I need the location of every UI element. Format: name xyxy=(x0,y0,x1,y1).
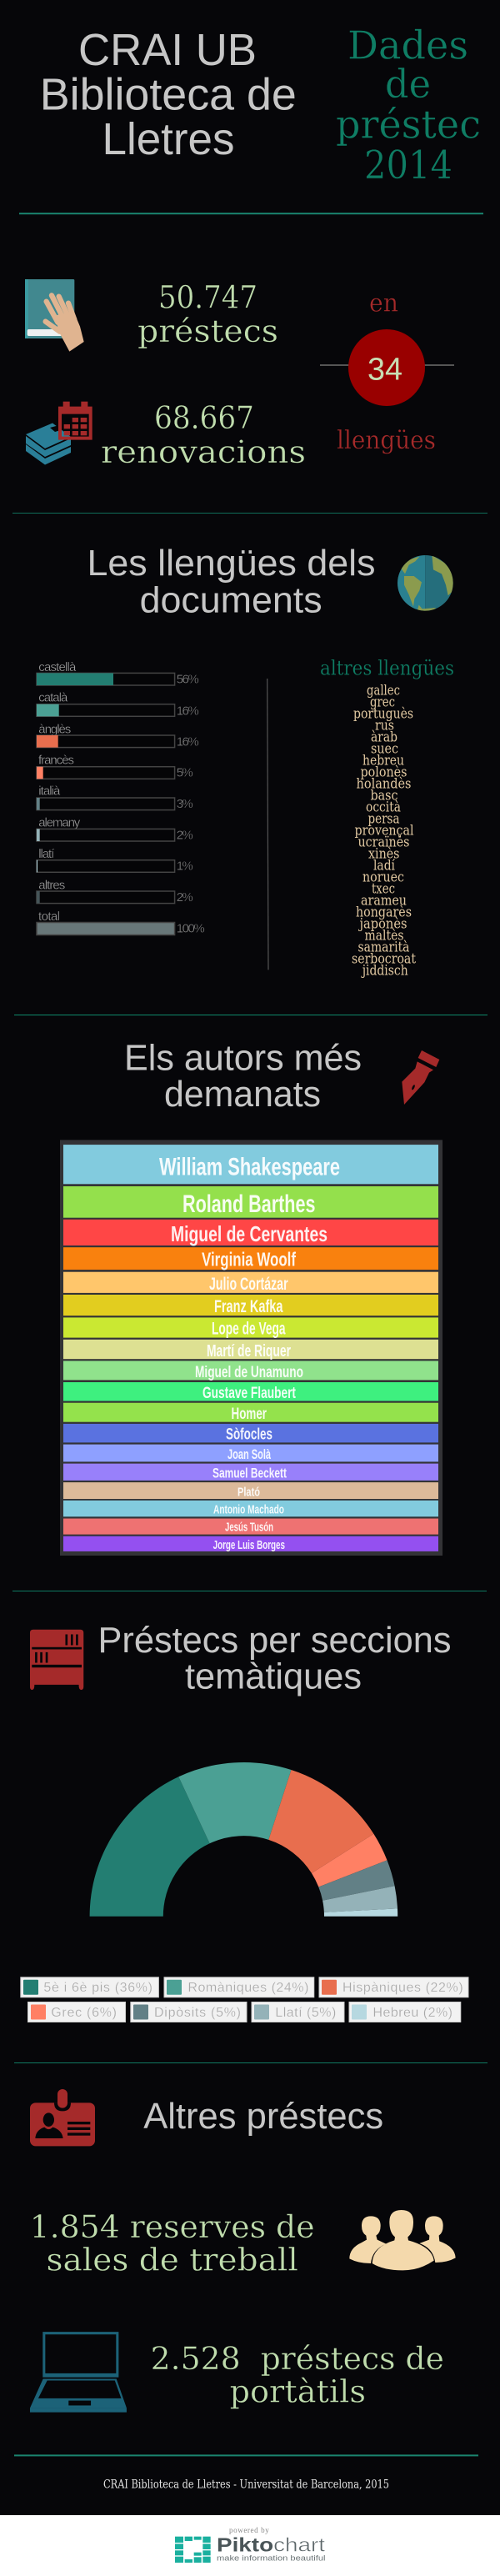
heading: Les llengües dels documents xyxy=(87,543,375,620)
icon: group of people xyxy=(349,2210,456,2270)
legend item: Hebreu: Hebreu (2%) xyxy=(372,2006,452,2020)
bar: italià 3%: 3% xyxy=(177,797,193,811)
row: Homer: Homer xyxy=(232,1406,267,1423)
row: Samuel Beckett: Samuel Beckett xyxy=(212,1466,287,1481)
row: Plató xyxy=(63,1482,438,1500)
stat: 50.747 préstecs xyxy=(138,280,278,349)
logo wordmark: Pikto chart xyxy=(217,2534,326,2556)
callout: en 34 llengües: en xyxy=(369,289,398,318)
bar: català 16% xyxy=(37,691,199,718)
bar: ànglès 16%: ànglès xyxy=(38,723,71,737)
row: Plató: Plató xyxy=(238,1486,260,1500)
bar: llatí 1% xyxy=(37,847,193,873)
heading: Altres préstecs: Altres préstecs xyxy=(143,2096,383,2137)
icon: stack of books xyxy=(26,423,71,465)
bar: italià 3%: italià xyxy=(38,784,61,799)
heading: Els autors més demanats: Els autors més xyxy=(124,1038,362,1079)
list: altres llengües: arameu xyxy=(361,892,407,909)
subtitle: Dades de préstec 2014: 2014 xyxy=(364,143,452,188)
bar: llatí 1%: llatí xyxy=(38,847,55,861)
slice: Grec 6% xyxy=(312,1834,387,1887)
list: altres llengües: serbocroat xyxy=(352,950,416,967)
stat: 1.854 reserves de sales de treball: sales de treball xyxy=(47,2243,298,2278)
bar: castellà 56%: castellà xyxy=(38,660,77,674)
icon: bookshelf xyxy=(30,1630,83,1690)
slice: Romàniques 24% xyxy=(178,1762,292,1843)
row: Lope de Vega xyxy=(63,1317,438,1339)
list: altres llengües: hongarès xyxy=(356,904,412,920)
footer band: powered by Piktochart: powered by xyxy=(229,2526,269,2534)
callout: en 34 llengües: 34 xyxy=(368,352,402,387)
list: altres llengües: suec xyxy=(371,740,398,757)
slice: Llatí 5% xyxy=(322,1886,398,1912)
list: altres llengües: occità xyxy=(366,799,401,815)
row: Miguel de Cervantes xyxy=(63,1220,438,1246)
heading: Préstecs per seccions temàtiques: Préstecs per seccions xyxy=(98,1620,452,1661)
row: Gustave Flaubert: Gustave Flaubert xyxy=(202,1385,296,1402)
row: Martí de Riquer xyxy=(63,1340,438,1361)
list: altres llengües: grec xyxy=(370,694,395,710)
legend item: Grec xyxy=(28,2002,125,2022)
legend item: Dipòsits: Dipòsits (5%) xyxy=(154,2006,241,2020)
row: Jorge Luis Borges: Jorge Luis Borges xyxy=(213,1538,285,1552)
row: Antonio Machado xyxy=(63,1501,438,1516)
bar: castellà 56% xyxy=(37,660,199,686)
slice: Dipòsits 5% xyxy=(318,1860,395,1901)
bar: català 16%: català xyxy=(38,691,68,705)
footer credit: CRAI Biblioteca de Lletres - Universitat de Barcelona, 2015 xyxy=(103,2478,389,2491)
row: Virginia Woolf: Virginia Woolf xyxy=(202,1248,296,1270)
list: altres llengües: samarità xyxy=(358,939,410,955)
bar: alemany 2% xyxy=(37,815,193,842)
legend item: Llatí: Llatí (5%) xyxy=(275,2006,336,2020)
row: Jesús Tusón: Jesús Tusón xyxy=(225,1521,273,1535)
row: Antonio Machado: Antonio Machado xyxy=(213,1502,284,1516)
legend item: Grec: Grec (6%) xyxy=(51,2006,117,2020)
title: CRAI UB Biblioteca de Lletres: Lletres xyxy=(102,114,235,164)
list: altres llengües: basc xyxy=(370,787,398,804)
slice: Hebreu 2% xyxy=(324,1908,398,1917)
row: William Shakespeare xyxy=(63,1145,438,1184)
row: Virginia Woolf xyxy=(63,1247,438,1270)
list: altres llengües: txec xyxy=(372,880,395,897)
list: altres llengües: altres llengües xyxy=(320,656,454,679)
list: altres llengües: portuguès xyxy=(353,705,413,722)
row: Lope de Vega: Lope de Vega xyxy=(212,1320,286,1339)
list: altres llengües: ladí xyxy=(373,857,395,874)
stat: 68.667 renovacions: 68.667 xyxy=(154,400,254,436)
stat: 2.528 préstecs de portàtils: 2.528 préstecs de xyxy=(151,2341,444,2377)
bar: altres 2% xyxy=(37,879,193,905)
icon: book with hand xyxy=(25,279,84,352)
list: altres llengües: rus xyxy=(375,717,394,734)
list: altres llengües: japonès xyxy=(358,915,407,932)
row: Samuel Beckett xyxy=(63,1464,438,1481)
list: altres llengües: gallec xyxy=(367,682,400,699)
subtitle: Dades de préstec 2014: Dades xyxy=(348,23,468,68)
list: altres llengües: provençal xyxy=(355,822,413,839)
list: altres llengües: jiddisch xyxy=(361,962,408,979)
title: CRAI UB Biblioteca de Lletres: Biblioteca de xyxy=(40,70,297,120)
row: William Shakespeare: William Shakespeare xyxy=(159,1154,340,1180)
title: CRAI UB Biblioteca de Lletres xyxy=(40,25,297,164)
stat: 50.747 préstecs: préstecs xyxy=(138,313,278,349)
heading: Préstecs per seccions temàtiques xyxy=(98,1620,452,1697)
bar: altres 2%: altres xyxy=(38,879,65,893)
slice: Hispàniques 22% xyxy=(268,1770,373,1873)
row: Roland Barthes: Roland Barthes xyxy=(182,1190,315,1218)
footer band: powered by Piktochart xyxy=(0,2515,500,2576)
legend item: 5è i 6è pis xyxy=(21,1977,158,1997)
row: Franz Kafka: Franz Kafka xyxy=(214,1297,283,1316)
stat: 1.854 reserves de sales de treball: 1.854 reserves de xyxy=(30,2209,315,2245)
legend item: Romàniques: Romàniques (24%) xyxy=(188,1981,308,1995)
heading: Els autors més demanats xyxy=(124,1038,362,1115)
bar: total 100% xyxy=(37,910,205,935)
row: Julio Cortázar xyxy=(63,1272,438,1294)
list: altres llengües: noruec xyxy=(362,869,404,885)
bar: ànglès 16% xyxy=(37,723,199,749)
stat: 50.747 préstecs: 50.747 xyxy=(158,280,258,316)
bar chart: llengües xyxy=(37,660,205,935)
stat: 68.667 renovacions xyxy=(101,400,306,470)
legend item: Dipòsits xyxy=(131,2002,247,2022)
heading: Els autors més demanats: demanats xyxy=(164,1074,321,1115)
row: Roland Barthes xyxy=(63,1186,438,1218)
row: Julio Cortázar: Julio Cortázar xyxy=(209,1275,288,1294)
callout: en 34 llengües xyxy=(320,289,454,455)
list: altres llengües: maltès xyxy=(365,927,403,944)
subtitle: Dades de préstec 2014 xyxy=(336,23,481,188)
legend xyxy=(21,1977,468,2022)
bar: alemany 2%: alemany xyxy=(38,815,81,829)
icon: fountain pen nib xyxy=(402,1050,439,1105)
bar: total 100%: total xyxy=(38,910,60,924)
legend item: 5è i 6è pis: 5è i 6è pis (36%) xyxy=(43,1981,152,1995)
subtitle: Dades de préstec 2014: de xyxy=(385,62,431,108)
row: Homer xyxy=(63,1403,438,1423)
bar: llatí 1%: 1% xyxy=(177,859,193,873)
logo mark xyxy=(175,2537,211,2563)
list: altres llengües xyxy=(320,656,454,979)
legend item: Hispàniques: Hispàniques (22%) xyxy=(342,1981,463,1995)
legend item: Hebreu xyxy=(349,2002,461,2022)
row: Joan Solà: Joan Solà xyxy=(228,1446,271,1462)
row: Miguel de Unamuno: Miguel de Unamuno xyxy=(195,1364,303,1381)
slice: 5è i 6è pis 36% xyxy=(90,1777,210,1917)
bar: italià 3% xyxy=(37,784,193,811)
list: altres llengües: persa xyxy=(368,810,400,827)
icon: calendar xyxy=(58,402,92,440)
row: Gustave Flaubert xyxy=(63,1382,438,1402)
heading: Les llengües dels documents: documents xyxy=(140,579,322,620)
table: most requested authors xyxy=(60,1140,442,1556)
row: Jesús Tusón xyxy=(63,1519,438,1535)
legend item: Llatí xyxy=(252,2002,344,2022)
icon: ID badge xyxy=(30,2089,95,2146)
list: altres llengües: polonès xyxy=(360,764,407,780)
list: altres llengües: àrab xyxy=(371,729,398,745)
list: altres llengües: xinès xyxy=(368,845,400,862)
callout: en 34 llengües: llengües xyxy=(337,426,436,455)
bar: castellà 56%: 56% xyxy=(177,672,199,686)
bar: francès 5%: francès xyxy=(38,754,74,768)
list: altres llengües: ucraïnès xyxy=(358,834,410,850)
stat: 2.528 préstecs de portàtils xyxy=(151,2341,444,2409)
row: Martí de Riquer: Martí de Riquer xyxy=(207,1342,291,1361)
row: Miguel de Cervantes: Miguel de Cervantes xyxy=(171,1221,328,1246)
footer band: powered by Piktochart: make information beautiful xyxy=(217,2553,325,2563)
bar: francès 5%: 5% xyxy=(177,765,193,779)
row: Franz Kafka xyxy=(63,1295,438,1316)
heading: Les llengües dels documents: Les llengües dels xyxy=(87,543,375,584)
list: altres llengües: hebreu xyxy=(362,752,404,769)
row: Sòfocles: Sòfocles xyxy=(226,1426,272,1444)
icon: laptop xyxy=(30,2332,127,2413)
title: CRAI UB Biblioteca de Lletres: CRAI UB xyxy=(78,25,257,75)
list: altres llengües: holandès xyxy=(357,775,412,792)
bar: català 16%: 16% xyxy=(177,704,199,718)
bar: altres 2%: 2% xyxy=(177,890,193,905)
icon: globe xyxy=(398,554,454,613)
stat: 1.854 reserves de sales de treball xyxy=(30,2209,315,2278)
legend item: Hispàniques xyxy=(319,1977,468,1997)
bar: francès 5% xyxy=(37,754,193,779)
chart: semi-donut by thematic section xyxy=(90,1762,398,1917)
row: Sòfocles xyxy=(63,1424,438,1444)
bar: ànglès 16%: 16% xyxy=(177,734,199,749)
stat: 2.528 préstecs de portàtils: portàtils xyxy=(230,2374,366,2409)
legend item: Romàniques xyxy=(164,1977,314,1997)
heading: Préstecs per seccions temàtiques: temàtiques xyxy=(185,1656,362,1697)
subtitle: Dades de préstec 2014: préstec xyxy=(336,102,481,148)
row: Jorge Luis Borges xyxy=(63,1536,438,1552)
row: Joan Solà xyxy=(63,1445,438,1462)
bar: total 100%: 100% xyxy=(177,921,205,935)
row: Miguel de Unamuno xyxy=(63,1361,438,1381)
bar: alemany 2%: 2% xyxy=(177,828,193,842)
stat: 68.667 renovacions: renovacions xyxy=(101,434,306,470)
